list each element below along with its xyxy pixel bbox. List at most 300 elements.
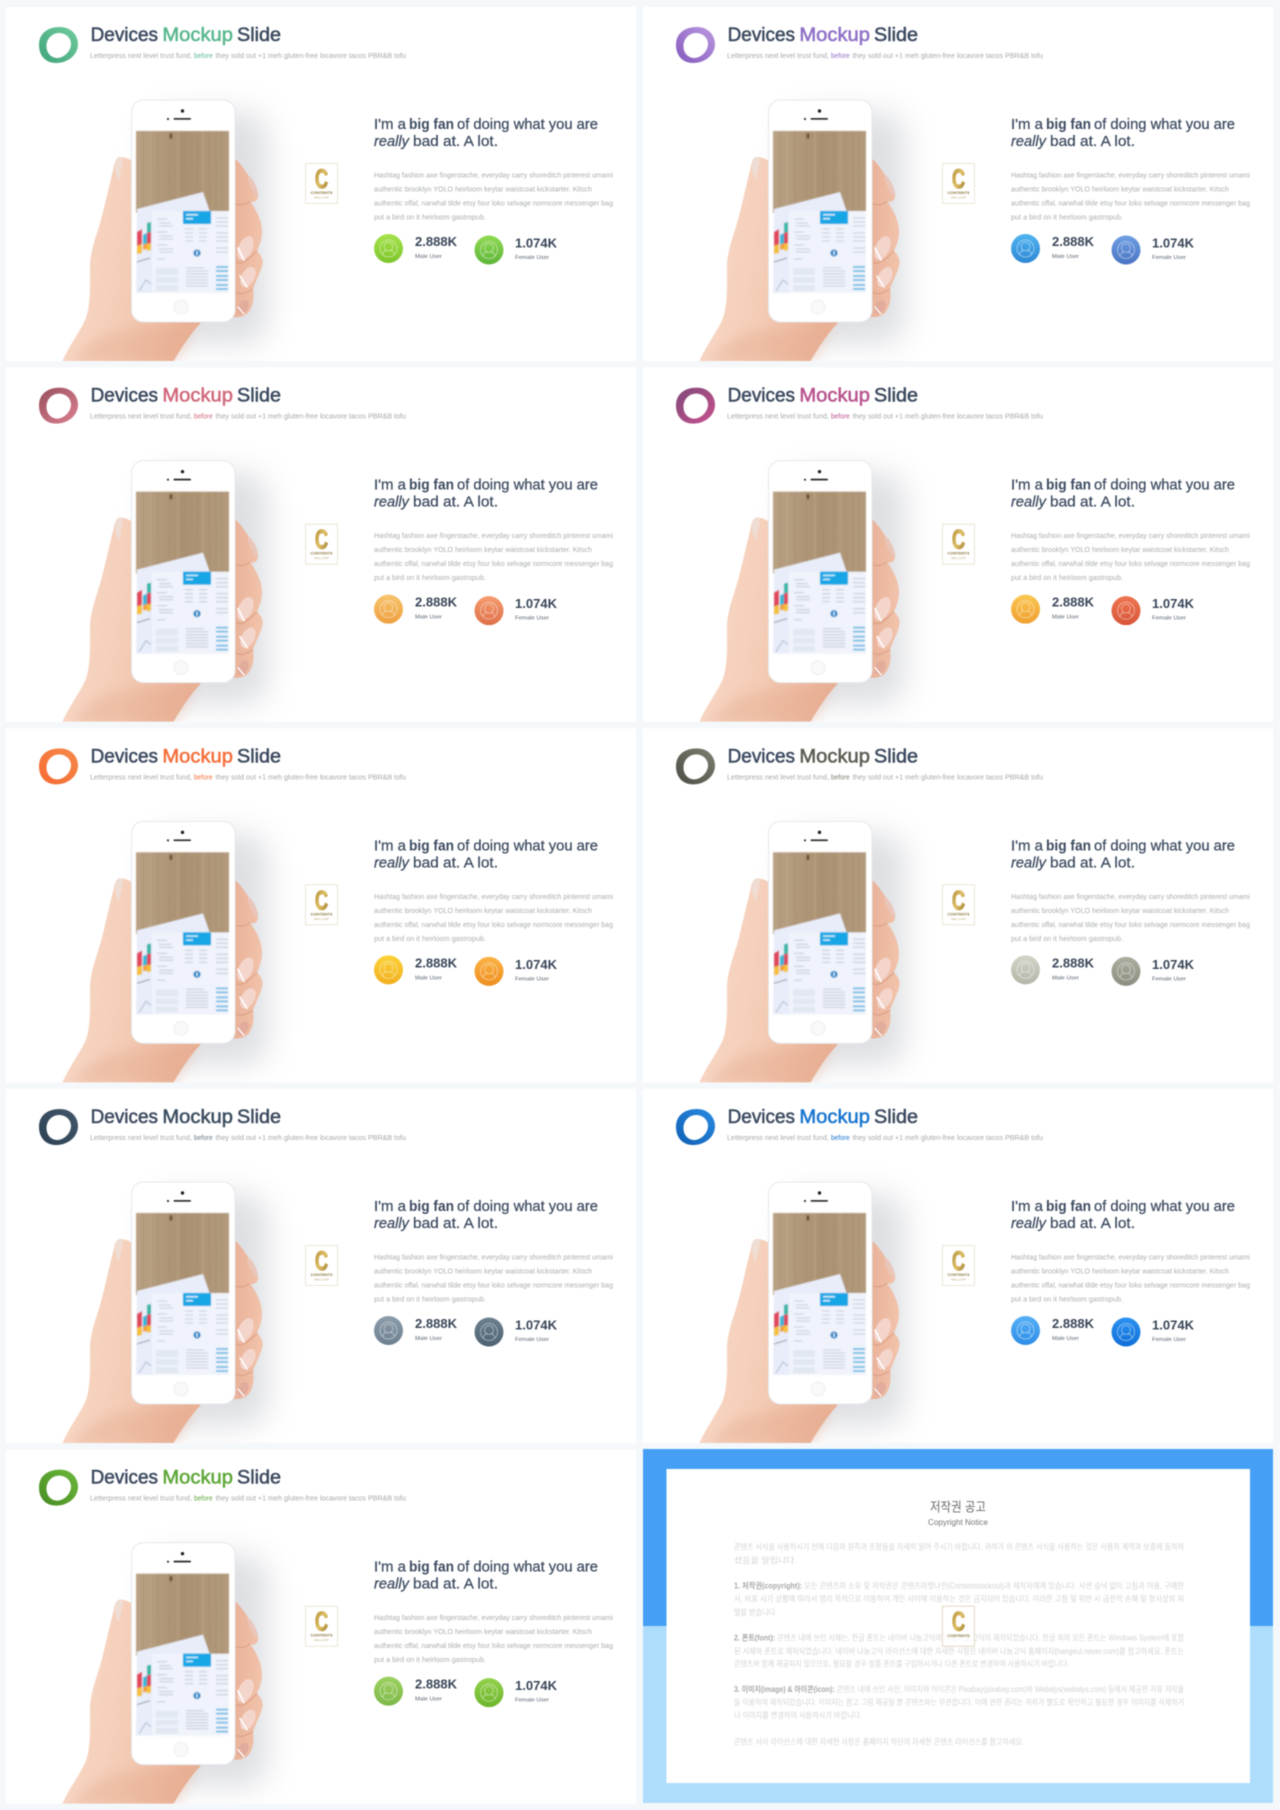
subtitle: before	[194, 1135, 213, 1142]
heading: big fan	[1046, 1198, 1091, 1215]
heading	[1011, 1198, 1235, 1232]
heading: I'm a	[374, 1559, 407, 1576]
body text	[1011, 894, 1250, 943]
notice body text: 콘텐츠 서식을 사용하시기 전에 다음의 원칙과 조항들을 자세히 읽어 주시기 바랍니다. 귀하가 이 콘텐츠 서식을 사용하는 것은 사용자 계약과 보증에 동의하	[734, 1542, 1185, 1552]
phone in hand	[699, 1182, 905, 1444]
heading: bad at. A lot.	[1050, 133, 1135, 150]
stat: male user	[1011, 595, 1095, 624]
body text: Hashtag fashion axe fingerstache, everyday carry shoreditch pinterest umami	[374, 172, 613, 180]
slide title	[91, 1106, 281, 1128]
icon: contents badge: CONTENTS	[948, 551, 970, 556]
body text: put a bird on it heirloom gastropub.	[1011, 575, 1123, 582]
notice body text: 콘텐츠와 함께 제공되지 않으므로, 필요할 경우 정품 폰트를 구입하시거나 다른 폰트로 변경하여 사용하시기 바랍니다.	[734, 1658, 1069, 1668]
stat: female user: Female User	[515, 255, 549, 261]
icon: ring logo	[676, 748, 715, 784]
subtitle: Letterpress next level trust fund,	[727, 53, 829, 60]
body text: Hashtag fashion axe fingerstache, everyday carry shoreditch pinterest umami	[1011, 894, 1250, 901]
stat: male user: 2.888K	[415, 955, 458, 970]
slide 1: green	[6, 7, 636, 362]
body text: authentic brooklyn YOLO heirloom keytar waistcoat kickstarter. Kitsch	[374, 1629, 592, 1636]
notice title: 저작권 공고	[930, 1500, 986, 1514]
heading: big fan	[1046, 477, 1091, 494]
icon: contents badge	[306, 885, 338, 925]
icon: contents badge: WALL LOOP	[314, 556, 329, 560]
slide title: Slide	[237, 385, 281, 407]
body text: authentic offal, narwhal tilde etsy four loko selvage normcore messenger bag	[1011, 922, 1250, 929]
heading: of doing what you are	[1094, 837, 1235, 854]
heading: really	[1011, 133, 1047, 150]
icon: ring logo	[39, 1109, 78, 1145]
body text: authentic offal, narwhal tilde etsy four loko selvage normcore messenger bag	[374, 1282, 613, 1290]
stat: female user	[474, 1318, 558, 1346]
stat: male user	[1011, 955, 1095, 984]
heading: really	[374, 854, 410, 871]
subtitle: before	[831, 414, 850, 421]
icon: contents badge	[942, 164, 974, 204]
slide 5: orange	[6, 728, 636, 1083]
body text: put a bird on it heirloom gastropub.	[374, 214, 486, 222]
heading	[374, 116, 598, 150]
phone in hand	[699, 821, 905, 1083]
heading	[374, 837, 598, 871]
body text: authentic brooklyn YOLO heirloom keytar waistcoat kickstarter. Kitsch	[374, 1268, 592, 1276]
stat: female user: Female User	[515, 616, 549, 622]
icon: contents badge: CONTENTS	[310, 190, 333, 195]
blue upper frame	[643, 1449, 1273, 1626]
heading	[374, 1559, 598, 1593]
stat: male user: Male User	[415, 254, 442, 260]
notice body text: 을 이용하여 제작되었습니다. 이미지는 참고 그림 제공일 뿐 콘텐츠와는 무관합니다. 이에 관한 권리는 귀하가 별도로 확인하고 필요한 경우 이미지를 삭제하거	[734, 1697, 1184, 1707]
stat: male user: Male User	[1052, 254, 1079, 260]
stat: female user	[1112, 957, 1195, 986]
slide title: Mockup	[162, 1467, 233, 1489]
body text: Hashtag fashion axe fingerstache, everyday carry shoreditch pinterest umami	[374, 1254, 613, 1262]
slide 6: grey	[643, 728, 1273, 1083]
body text: put a bird on it heirloom gastropub.	[374, 575, 486, 582]
body text: authentic offal, narwhal tilde etsy four loko selvage normcore messenger bag	[1011, 200, 1250, 208]
heading: bad at. A lot.	[413, 133, 498, 150]
stat: male user: 2.888K	[415, 595, 458, 610]
icon: contents badge	[306, 1246, 338, 1286]
icon: contents badge	[942, 885, 974, 925]
body text	[374, 533, 613, 582]
icon: contents badge: CONTENTS	[310, 551, 333, 556]
heading	[1011, 837, 1235, 871]
notice body text: 사, 비표 사기 상황에 따라서 영리 목적으로 이용하여 개인 사이에 이용하는 것은 금지되어 있습니다. 이러한 고침 및 위반 시 금전적 손해 및 형사상의 처	[734, 1594, 1184, 1604]
body text: put a bird on it heirloom gastropub.	[1011, 214, 1123, 222]
stat: female user: 1.074K	[1152, 236, 1195, 250]
icon: contents badge: WALL LOOP	[314, 1638, 329, 1642]
phone in hand	[62, 821, 268, 1083]
slide title: Slide	[874, 24, 918, 46]
subtitle: they sold out +1 meh gluten-free locavore tacos PBR&B tofu	[216, 774, 406, 781]
phone in hand	[62, 100, 268, 362]
slide background	[643, 1089, 1273, 1443]
slide title: Devices	[728, 1106, 795, 1128]
slide title: Devices	[728, 745, 795, 767]
icon: ring logo	[39, 1470, 78, 1506]
subtitle: Letterpress next level trust fund,	[727, 414, 829, 421]
icon: ring logo	[39, 388, 78, 424]
slide title: Slide	[874, 385, 918, 407]
slide title: Mockup	[162, 24, 233, 46]
heading: bad at. A lot.	[1050, 854, 1135, 871]
slide background	[643, 728, 1273, 1082]
slide title: Devices	[91, 1467, 158, 1489]
stat: male user: 2.888K	[1052, 595, 1095, 610]
heading: bad at. A lot.	[413, 1576, 498, 1593]
slide title: Devices	[91, 1106, 158, 1128]
subtitle: before	[831, 774, 850, 781]
slide title: Mockup	[799, 745, 870, 767]
slide title: Mockup	[799, 385, 870, 407]
phone in hand	[62, 461, 268, 723]
stat: male user: 2.888K	[1052, 955, 1095, 970]
icon: contents badge: WALL LOOP	[951, 1278, 966, 1282]
stat: female user	[1112, 1318, 1195, 1346]
stat: male user: 2.888K	[1052, 1316, 1095, 1331]
heading: big fan	[409, 1198, 454, 1215]
heading: I'm a	[374, 837, 407, 854]
heading: I'm a	[1011, 116, 1044, 133]
slide title: Slide	[237, 745, 281, 767]
slide title: Devices	[91, 385, 158, 407]
stat: male user	[374, 1316, 458, 1345]
heading: really	[1011, 854, 1047, 871]
subtitle: they sold out +1 meh gluten-free locavore tacos PBR&B tofu	[852, 774, 1043, 781]
subtitle: they sold out +1 meh gluten-free locavore tacos PBR&B tofu	[216, 1496, 406, 1503]
stat: female user: 1.074K	[515, 1678, 558, 1693]
slide title	[91, 745, 281, 767]
slide title: Slide	[237, 1106, 281, 1128]
icon: ring logo	[676, 27, 715, 63]
subtitle: they sold out +1 meh gluten-free locavore tacos PBR&B tofu	[216, 1135, 406, 1142]
icon: contents badge: C	[315, 1246, 328, 1276]
heading: bad at. A lot.	[413, 494, 498, 511]
slide background	[6, 728, 636, 1082]
body text: authentic brooklyn YOLO heirloom keytar waistcoat kickstarter. Kitsch	[1011, 908, 1229, 915]
phone in hand	[62, 1182, 268, 1444]
icon: ring logo	[676, 1109, 715, 1145]
stat: female user	[474, 596, 558, 625]
slide title: Slide	[237, 1467, 281, 1489]
icon: contents badge	[306, 1606, 338, 1646]
heading: bad at. A lot.	[1050, 1215, 1135, 1232]
notice body text: 2. 폰트(font): 콘텐츠 내에 쓰인 서체는, 한글 폰트는 네이버 나눔고딕의 서체와 윤고딕이 제작되었습니다. 한글 외의 모든 폰트는 Windows System에 포함	[734, 1632, 1185, 1642]
heading: of doing what you are	[1094, 1198, 1235, 1215]
subtitle: they sold out +1 meh gluten-free locavore tacos PBR&B tofu	[852, 414, 1043, 421]
slide title	[728, 385, 918, 407]
icon: contents badge	[306, 524, 338, 564]
stat: female user: Female User	[515, 1698, 549, 1704]
notice body text: 셨음을 알립니다.	[734, 1555, 797, 1565]
body text: put a bird on it heirloom gastropub.	[1011, 1296, 1123, 1304]
heading: of doing what you are	[457, 1198, 598, 1215]
phone in hand	[699, 461, 905, 723]
phone in hand	[62, 1543, 268, 1805]
body text: authentic brooklyn YOLO heirloom keytar waistcoat kickstarter. Kitsch	[1011, 1268, 1229, 1276]
subtitle: before	[831, 1135, 850, 1142]
stat: female user	[1112, 236, 1195, 264]
heading: really	[374, 1215, 410, 1232]
slide title: Devices	[91, 24, 158, 46]
stat: female user: 1.074K	[515, 236, 558, 250]
body text: put a bird on it heirloom gastropub.	[1011, 936, 1123, 943]
heading: really	[374, 133, 410, 150]
slide background	[6, 1089, 636, 1443]
slide 8: blue	[643, 1089, 1273, 1444]
subtitle	[90, 1135, 406, 1142]
stat: male user	[374, 595, 458, 624]
icon: contents badge: C	[315, 525, 328, 555]
slide 3: rose	[6, 368, 636, 723]
heading	[374, 477, 598, 511]
stat: male user: Male User	[415, 1697, 442, 1703]
subtitle	[727, 414, 1043, 421]
notice subtitle: Copyright Notice	[928, 1517, 988, 1527]
subtitle: they sold out +1 meh gluten-free locavore tacos PBR&B tofu	[216, 414, 406, 421]
stat: male user: Male User	[1052, 1336, 1079, 1342]
stat: female user: 1.074K	[515, 596, 558, 611]
body text	[374, 894, 613, 943]
heading: big fan	[409, 837, 454, 854]
body text: authentic brooklyn YOLO heirloom keytar waistcoat kickstarter. Kitsch	[374, 908, 592, 915]
icon: contents badge: C	[315, 885, 328, 915]
subtitle: before	[194, 774, 213, 781]
icon: contents badge: WALL LOOP	[314, 1278, 329, 1282]
heading: big fan	[409, 477, 454, 494]
slide background	[6, 1450, 636, 1804]
slide title: Mockup	[162, 1106, 233, 1128]
slide title: Slide	[874, 1106, 918, 1128]
subtitle: before	[194, 53, 213, 60]
body text: put a bird on it heirloom gastropub.	[374, 1296, 486, 1304]
subtitle: Letterpress next level trust fund,	[727, 1135, 829, 1142]
icon: contents badge: WALL LOOP	[951, 196, 966, 200]
icon: contents badge: C	[952, 1246, 965, 1276]
notice body text: 된 서체와 폰트로 제작되었습니다. 네이버 나눔고딕 라이선스에 대한 자세한 사항은 네이버 나눔고딕 홈페이지(hangeul.naver.com)를 참고하세요. 폰트는	[734, 1646, 1184, 1656]
stat: female user: Female User	[1152, 255, 1186, 261]
stat: male user	[374, 1677, 458, 1706]
body text: authentic offal, narwhal tilde etsy four loko selvage normcore messenger bag	[374, 922, 613, 929]
stat: male user	[1011, 234, 1095, 263]
heading: bad at. A lot.	[1050, 494, 1135, 511]
stat: male user: 2.888K	[415, 234, 458, 249]
subtitle: Letterpress next level trust fund,	[90, 774, 192, 781]
icon: contents badge: C	[952, 164, 965, 194]
body text: authentic brooklyn YOLO heirloom keytar waistcoat kickstarter. Kitsch	[1011, 547, 1229, 554]
heading: really	[374, 1576, 410, 1593]
stat: male user: 2.888K	[415, 1677, 458, 1692]
heading: of doing what you are	[457, 116, 598, 133]
slide title	[91, 1467, 281, 1489]
icon: contents badge: WALL LOOP	[951, 556, 966, 560]
icon: contents badge	[942, 524, 974, 564]
icon: contents badge	[942, 1246, 974, 1286]
icon: ring logo	[676, 388, 715, 424]
icon: contents badge: CONTENTS	[310, 911, 333, 916]
notice body text: 1. 저작권(copyright): 모든 콘텐츠의 소유 및 저작권은 콘텐츠마켓나인(Contentstockout)과 제작자에게 있습니다. 사전 승낙 없이 고침과 이용, 구매한	[734, 1580, 1185, 1590]
body text: authentic brooklyn YOLO heirloom keytar waistcoat kickstarter. Kitsch	[1011, 186, 1229, 194]
slide title	[728, 745, 918, 767]
stat: male user	[374, 955, 458, 984]
stat: male user	[1011, 1316, 1095, 1345]
slide title: Devices	[91, 745, 158, 767]
slide title: Slide	[237, 24, 281, 46]
subtitle	[727, 1135, 1043, 1142]
stat: female user	[474, 957, 558, 986]
heading	[1011, 116, 1235, 150]
slide title	[728, 1106, 918, 1128]
icon: contents badge	[306, 164, 338, 204]
subtitle: before	[831, 53, 850, 60]
body text: authentic offal, narwhal tilde etsy four loko selvage normcore messenger bag	[374, 200, 613, 208]
slide title: Mockup	[799, 1106, 870, 1128]
icon: contents badge: WALL LOOP	[314, 917, 329, 921]
icon: contents badge: CONTENTS	[948, 911, 970, 916]
stat: female user: 1.074K	[1152, 1318, 1195, 1332]
phone in hand	[699, 100, 905, 362]
body text: authentic offal, narwhal tilde etsy four loko selvage normcore messenger bag	[1011, 1282, 1250, 1290]
heading: of doing what you are	[457, 837, 598, 854]
slide title: Mockup	[162, 385, 233, 407]
icon: ring logo	[39, 748, 78, 784]
heading	[374, 1198, 598, 1232]
stat: female user: 1.074K	[515, 957, 558, 972]
stat: male user: Male User	[1052, 615, 1079, 621]
heading: bad at. A lot.	[413, 1215, 498, 1232]
slide 2: purple	[643, 7, 1273, 362]
icon: contents badge: WALL LOOP	[314, 196, 329, 200]
slide title	[91, 385, 281, 407]
body text: authentic brooklyn YOLO heirloom keytar waistcoat kickstarter. Kitsch	[374, 547, 592, 554]
subtitle	[727, 53, 1043, 60]
slide title: Slide	[874, 745, 918, 767]
light blue lower frame	[643, 1626, 1273, 1803]
slide title: Mockup	[162, 745, 233, 767]
heading: big fan	[1046, 837, 1091, 854]
body text	[374, 1254, 613, 1304]
body text: Hashtag fashion axe fingerstache, everyday carry shoreditch pinterest umami	[1011, 1254, 1250, 1262]
subtitle: before	[194, 414, 213, 421]
heading: I'm a	[374, 477, 407, 494]
stat: female user	[474, 236, 558, 264]
body text	[374, 172, 613, 222]
icon: contents badge	[942, 1606, 974, 1646]
body text: Hashtag fashion axe fingerstache, everyday carry shoreditch pinterest umami	[1011, 172, 1250, 180]
body text: put a bird on it heirloom gastropub.	[374, 1657, 486, 1664]
slide background	[6, 7, 636, 361]
subtitle: they sold out +1 meh gluten-free locavore tacos PBR&B tofu	[216, 53, 406, 60]
heading: big fan	[1046, 116, 1091, 133]
stat: male user: Male User	[415, 615, 442, 621]
stat: female user: Female User	[1152, 616, 1186, 622]
heading: really	[1011, 1215, 1047, 1232]
body text: authentic offal, narwhal tilde etsy four loko selvage normcore messenger bag	[374, 561, 613, 568]
slide title: Devices	[728, 385, 795, 407]
heading: of doing what you are	[1094, 116, 1235, 133]
stat: female user: Female User	[1152, 1337, 1186, 1343]
stat: female user: 1.074K	[515, 1318, 558, 1332]
notice body text: 벌을 받습니다.	[734, 1607, 777, 1617]
stat: female user	[474, 1678, 558, 1707]
body text	[374, 1615, 613, 1664]
slide 7: navy	[6, 1089, 636, 1444]
body text	[1011, 172, 1250, 222]
slide title	[91, 24, 281, 46]
heading: really	[374, 494, 410, 511]
heading: I'm a	[374, 1198, 407, 1215]
stat: male user: Male User	[415, 975, 442, 981]
icon: contents badge: C	[315, 1607, 328, 1637]
stat: male user: Male User	[415, 1336, 442, 1342]
icon: contents badge: CONTENTS	[948, 190, 970, 195]
slide 4: magenta	[643, 368, 1273, 723]
subtitle: they sold out +1 meh gluten-free locavore tacos PBR&B tofu	[852, 53, 1043, 60]
subtitle: Letterpress next level trust fund,	[90, 53, 192, 60]
heading: of doing what you are	[457, 1559, 598, 1576]
stat: female user: 1.074K	[1152, 957, 1195, 972]
subtitle: they sold out +1 meh gluten-free locavore tacos PBR&B tofu	[852, 1135, 1043, 1142]
body text: authentic offal, narwhal tilde etsy four loko selvage normcore messenger bag	[374, 1643, 613, 1650]
icon: contents badge: CONTENTS	[310, 1272, 333, 1277]
slide title	[728, 24, 918, 46]
body text: Hashtag fashion axe fingerstache, everyday carry shoreditch pinterest umami	[374, 1615, 613, 1622]
icon: contents badge: CONTENTS	[310, 1633, 333, 1638]
icon: contents badge: C	[952, 885, 965, 915]
heading: bad at. A lot.	[413, 854, 498, 871]
heading	[1011, 477, 1235, 511]
icon: contents badge: C	[952, 525, 965, 555]
heading: big fan	[409, 116, 454, 133]
slide background	[643, 368, 1273, 722]
heading: really	[1011, 494, 1047, 511]
heading: big fan	[409, 1559, 454, 1576]
stat: female user: Female User	[515, 1337, 549, 1343]
stat: male user: 2.888K	[1052, 234, 1095, 249]
icon: contents badge: C	[952, 1607, 965, 1637]
notice body text: 콘텐츠 서식 라이선스에 대한 자세한 사항은 홈페이지 하단의 자세한 콘텐츠 라이선스를 참고하세요.	[734, 1736, 1024, 1746]
white notice card	[666, 1469, 1250, 1783]
slide background	[6, 368, 636, 722]
body text: Hashtag fashion axe fingerstache, everyday carry shoreditch pinterest umami	[374, 533, 613, 540]
body text: authentic brooklyn YOLO heirloom keytar waistcoat kickstarter. Kitsch	[374, 186, 592, 194]
stat: male user: Male User	[1052, 975, 1079, 981]
body text: Hashtag fashion axe fingerstache, everyday carry shoreditch pinterest umami	[1011, 533, 1250, 540]
icon: contents badge: C	[315, 164, 328, 194]
subtitle	[90, 1496, 406, 1503]
heading: of doing what you are	[1094, 477, 1235, 494]
slide 9: leaf green	[6, 1450, 636, 1805]
stat: female user	[1112, 596, 1195, 625]
subtitle: Letterpress next level trust fund,	[727, 774, 829, 781]
icon: contents badge: WALL LOOP	[951, 917, 966, 921]
panel: copyright notice	[643, 1449, 1273, 1803]
subtitle	[727, 774, 1043, 781]
subtitle: before	[194, 1496, 213, 1503]
slide background	[643, 7, 1273, 361]
icon: contents badge: CONTENTS	[948, 1633, 970, 1638]
subtitle	[90, 414, 406, 421]
notice body text: 3. 이미지(image) & 아이콘(icon): 콘텐츠 내에 쓰인 사진, 이미지와 아이콘은 Pixabay(pixabay.com)와 Webalys(webalys.com) 등에서 제공한 자유 저작물	[734, 1684, 1184, 1694]
icon: ring logo	[39, 27, 78, 63]
slide title: Devices	[728, 24, 795, 46]
heading: I'm a	[1011, 477, 1044, 494]
body text	[1011, 533, 1250, 582]
stat: female user: 1.074K	[1152, 596, 1195, 611]
notice body text	[734, 1542, 1185, 1746]
subtitle: Letterpress next level trust fund,	[90, 1496, 192, 1503]
